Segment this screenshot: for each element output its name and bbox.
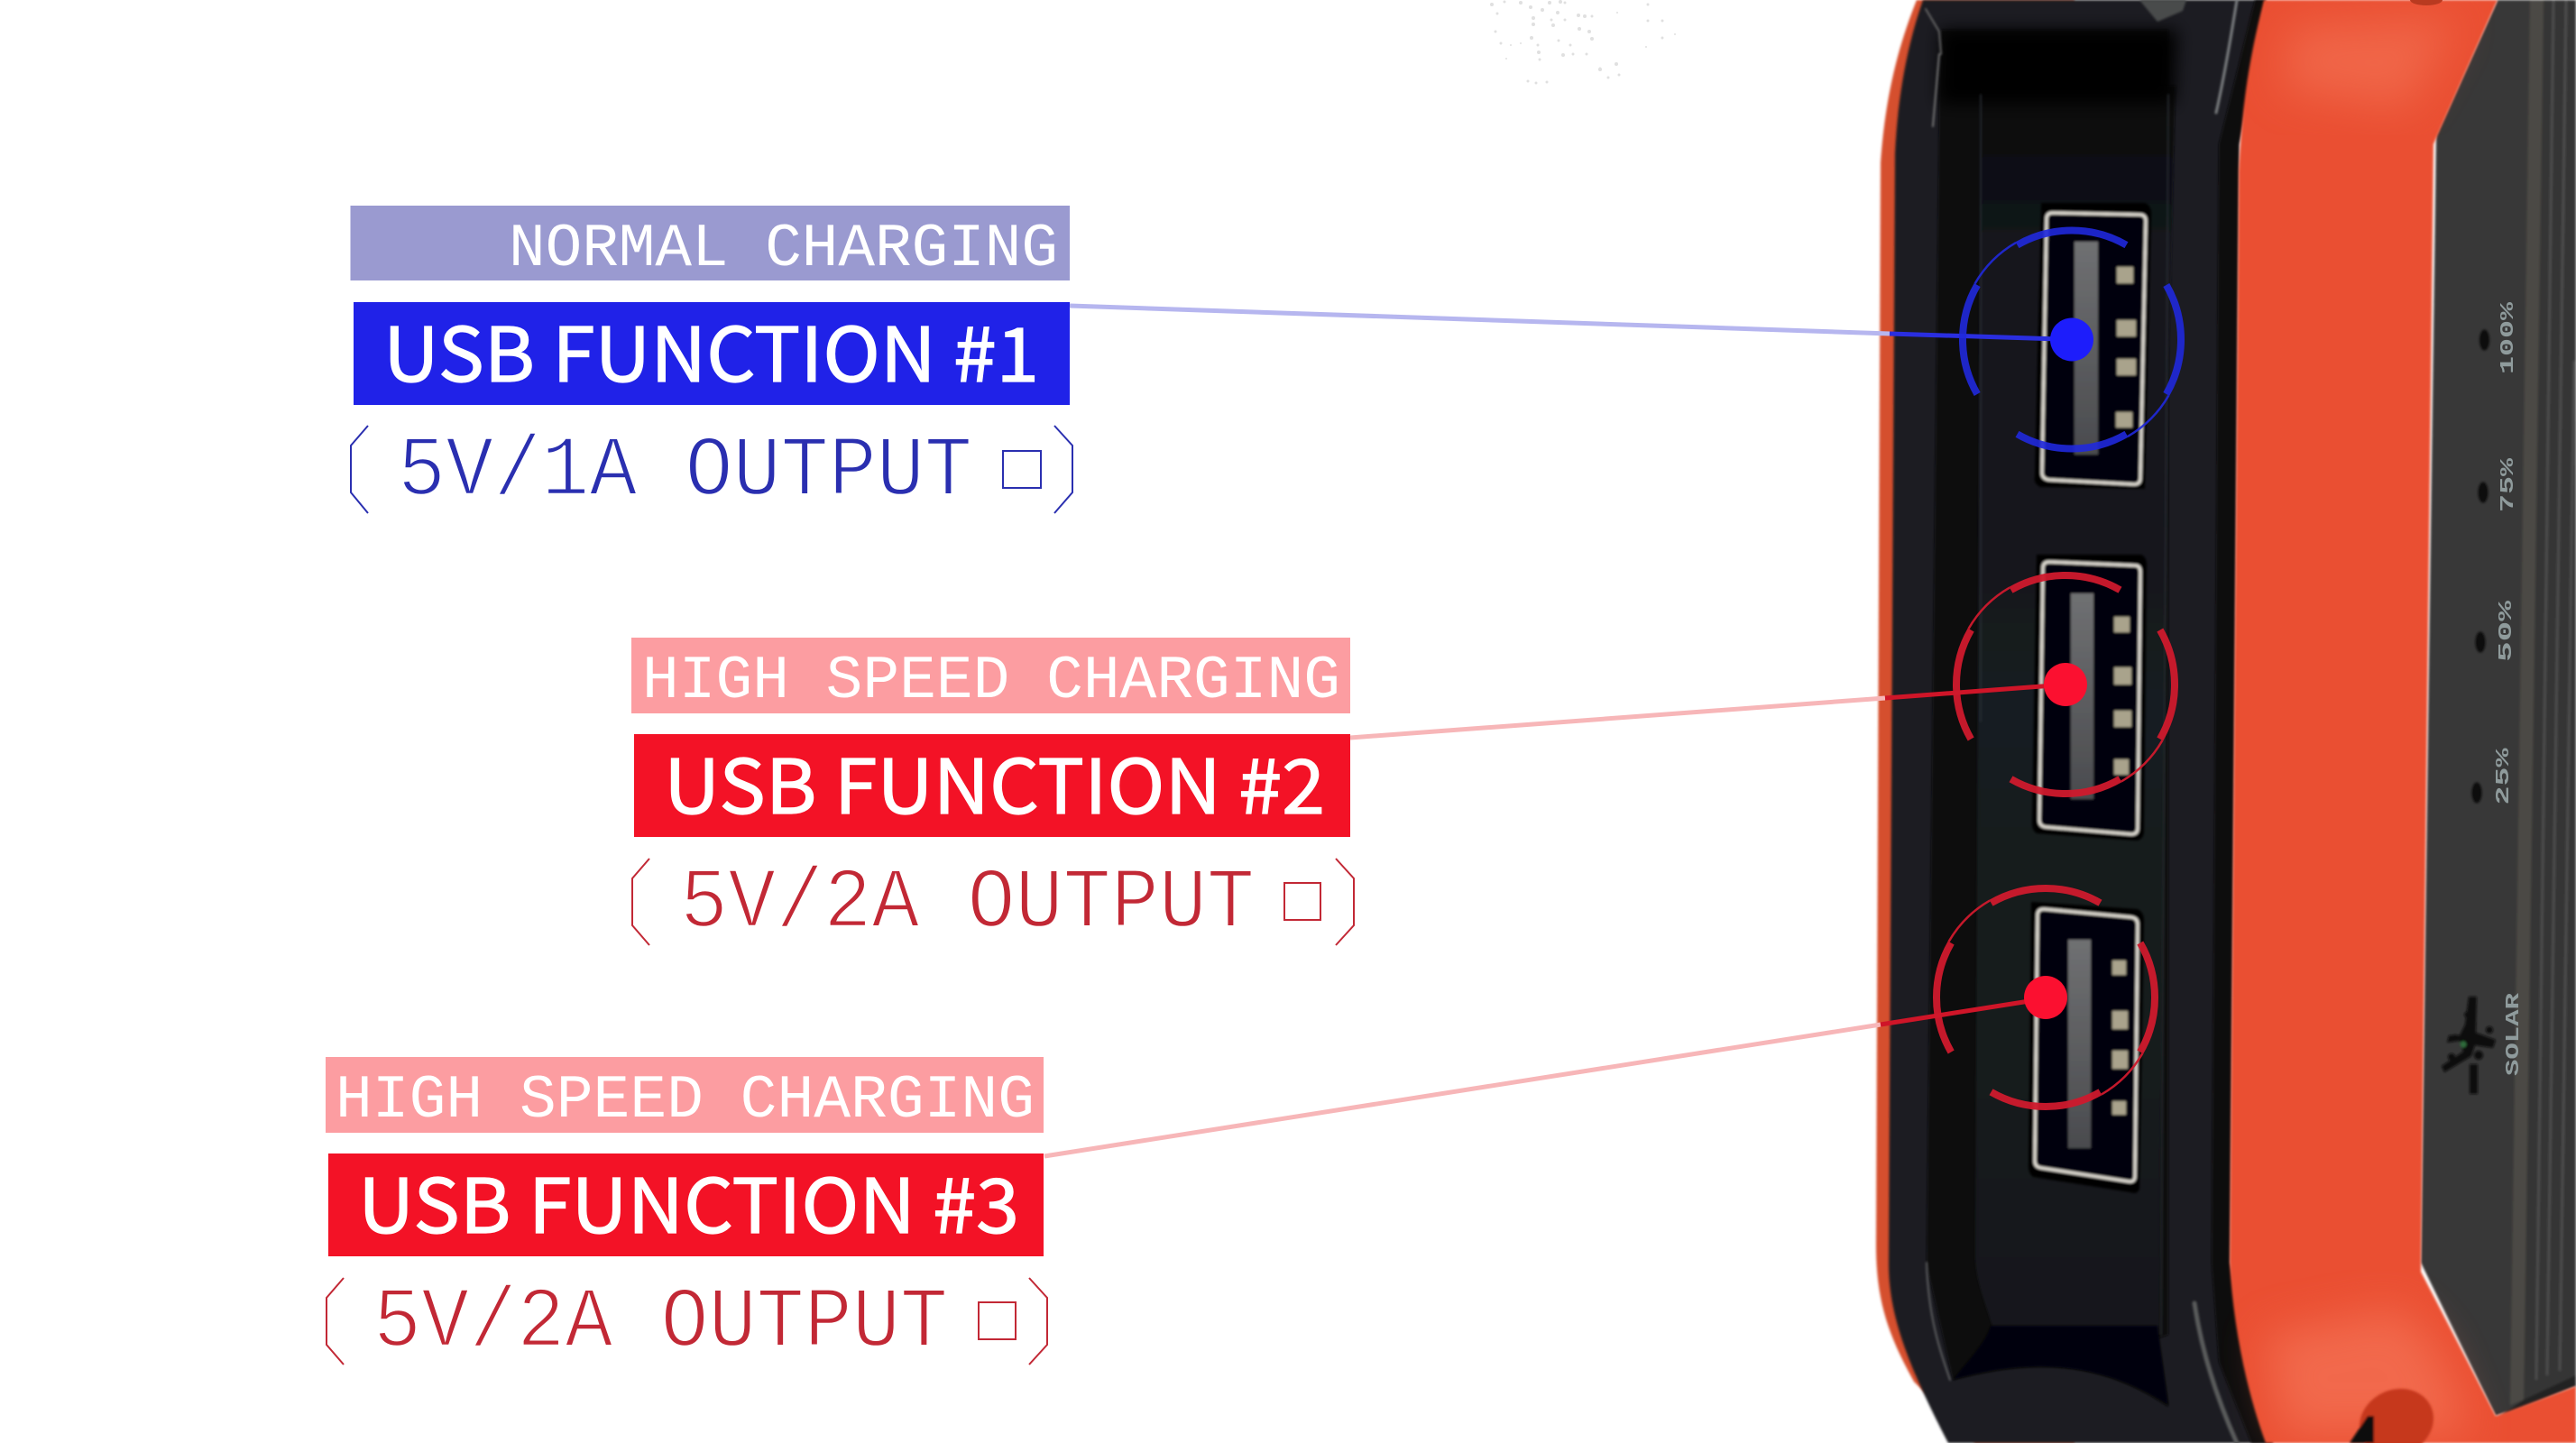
target ring 1 — [1963, 230, 2181, 449]
port surround — [2035, 203, 2151, 489]
battery labels — [2494, 301, 2525, 1076]
tongue — [2068, 940, 2091, 1148]
port surround — [2032, 555, 2147, 841]
label bar: high speed charging: HIGH SPEED CHARGING — [336, 1066, 1035, 1135]
recess: left column — [1927, 30, 2168, 1407]
bumper highlight bottom — [2264, 1308, 2471, 1434]
label bar: normal charging — [350, 206, 1070, 284]
right solar panel — [2421, 0, 2576, 1418]
battery labels: 50% — [2497, 600, 2517, 662]
callout 1: usb function 1 — [350, 206, 1072, 520]
pins — [2116, 267, 2136, 427]
target dot 1 — [2050, 317, 2093, 361]
tongue — [2071, 593, 2093, 799]
port frame — [2035, 909, 2138, 1181]
callout 2: usb function 2 — [631, 638, 1354, 952]
port frame — [2039, 562, 2140, 834]
target dot 3 — [2024, 976, 2067, 1019]
leader line 1 — [1070, 306, 2072, 339]
icon: solar sun — [2442, 997, 2496, 1094]
leader line 2 — [1350, 685, 2065, 738]
recess: inner panel — [1975, 86, 2176, 1335]
usb port 1 — [2035, 203, 2151, 489]
pins — [2112, 960, 2128, 1115]
device shell: orange back strip — [1876, 0, 2075, 1443]
label bar: high speed charging: HIGH SPEED CHARGING — [642, 647, 1340, 716]
battery labels: 100% — [2498, 301, 2519, 374]
title bar: usb function 3: USB FUNCTION #3 — [358, 1146, 1019, 1255]
output spec: 5V/2A OUTPUT — [680, 855, 1255, 952]
leader line 3 — [1044, 998, 2047, 1156]
port surround — [2029, 902, 2144, 1193]
recess: lower shadow band — [1953, 1326, 2168, 1405]
power bank device — [1876, 0, 2576, 1443]
keyring hole — [2349, 1377, 2444, 1443]
casing: right edge shadow — [2212, 0, 2273, 1443]
target ring 2 — [1956, 575, 2175, 794]
main orange bumper — [2230, 0, 2576, 1443]
port frame — [2042, 213, 2146, 484]
usb port 2 — [2032, 555, 2147, 841]
bumper top dark spot — [2410, 0, 2443, 5]
title bar: usb function 2: USB FUNCTION #2 — [664, 727, 1325, 835]
battery labels: 25% — [2494, 748, 2515, 805]
callout 3: usb function 3 — [326, 1057, 1047, 1372]
casing: edge highlights — [1926, 0, 2237, 1443]
recess: top shadow band — [1939, 30, 2177, 104]
background speckle — [1490, 0, 1676, 85]
battery labels: SOLAR — [2504, 992, 2525, 1076]
battery labels: 75% — [2498, 457, 2519, 512]
title bar: usb function 1: USB FUNCTION #1 — [383, 295, 1039, 403]
tongue — [2075, 242, 2098, 455]
pins — [2114, 617, 2131, 775]
target dot 2 — [2044, 663, 2087, 706]
output spec: 5V/1A OUTPUT — [398, 423, 972, 520]
bumper highlight top — [2282, 18, 2458, 108]
casing: top grunge patch — [2139, 0, 2186, 22]
usb port 3 — [2029, 902, 2144, 1193]
target ring 3 — [1937, 888, 2155, 1107]
label bar: normal charging: NORMAL CHARGING — [509, 215, 1058, 284]
battery indicator holes — [2471, 329, 2489, 804]
output spec: 5V/2A OUTPUT — [373, 1274, 948, 1372]
device body: black casing — [1889, 0, 2273, 1443]
